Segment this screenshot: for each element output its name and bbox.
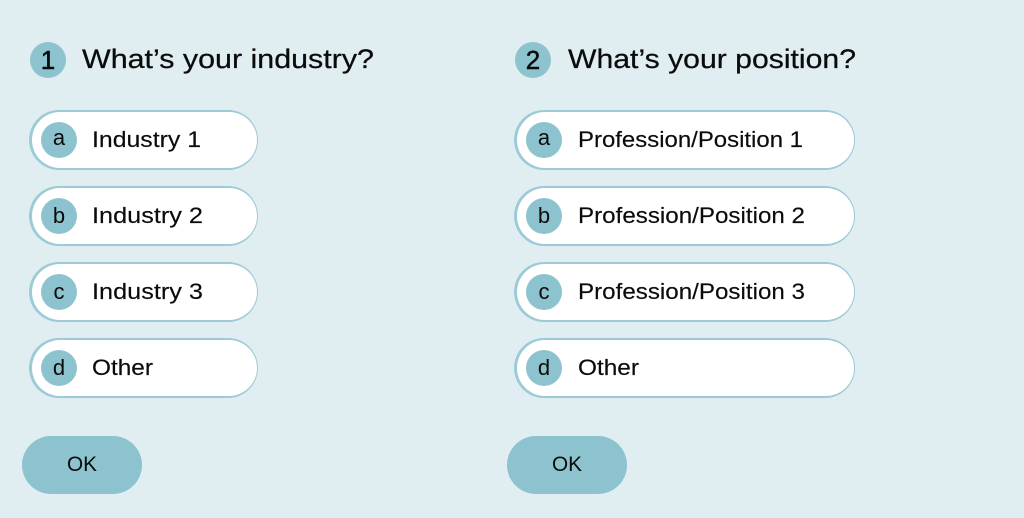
option d: Other <box>29 338 258 398</box>
button: OK <box>22 436 142 494</box>
option d: Other <box>514 338 855 398</box>
option a: Industry 1: Industry 1 <box>92 127 201 152</box>
option d: Other: Other <box>92 355 153 380</box>
option c: Profession/Position 3: Profession/Position 3 <box>578 279 805 304</box>
button: OK: OK <box>552 453 582 476</box>
option b: Profession/Position 2: b <box>538 203 550 228</box>
heading: question 1 <box>30 42 374 78</box>
option d: Other: Other <box>578 355 639 380</box>
option b: Industry 2 <box>29 186 258 246</box>
heading: question 2 <box>515 42 856 78</box>
option a: Profession/Position 1 <box>514 110 855 170</box>
option c: Profession/Position 3 <box>514 262 855 322</box>
option b: Profession/Position 2: Profession/Position 2 <box>578 203 805 228</box>
option c: Industry 3: Industry 3 <box>92 279 203 304</box>
option b: Profession/Position 2 <box>514 186 855 246</box>
button: OK <box>507 436 627 494</box>
panel: question 2 <box>507 42 856 494</box>
option d: Other: d <box>53 355 65 380</box>
option a: Industry 1 <box>29 110 258 170</box>
option a: Profession/Position 1: a <box>538 125 551 150</box>
option c: Industry 3 <box>29 262 258 322</box>
button: OK: OK <box>67 453 97 476</box>
option d: Other: d <box>538 355 550 380</box>
heading: question 2: What’s your position? <box>568 44 856 74</box>
panel: question 1 <box>22 42 374 494</box>
option c: Industry 3: c <box>54 279 64 304</box>
heading: question 1: 1 <box>41 45 55 75</box>
option a: Industry 1: a <box>53 125 66 150</box>
heading: question 1: What’s your industry? <box>82 44 374 74</box>
heading: question 2: 2 <box>526 45 540 75</box>
option c: Profession/Position 3: c <box>538 279 550 304</box>
option b: Industry 2: Industry 2 <box>92 203 203 228</box>
option a: Profession/Position 1: Profession/Position 1 <box>578 127 803 152</box>
option b: Industry 2: b <box>53 203 65 228</box>
